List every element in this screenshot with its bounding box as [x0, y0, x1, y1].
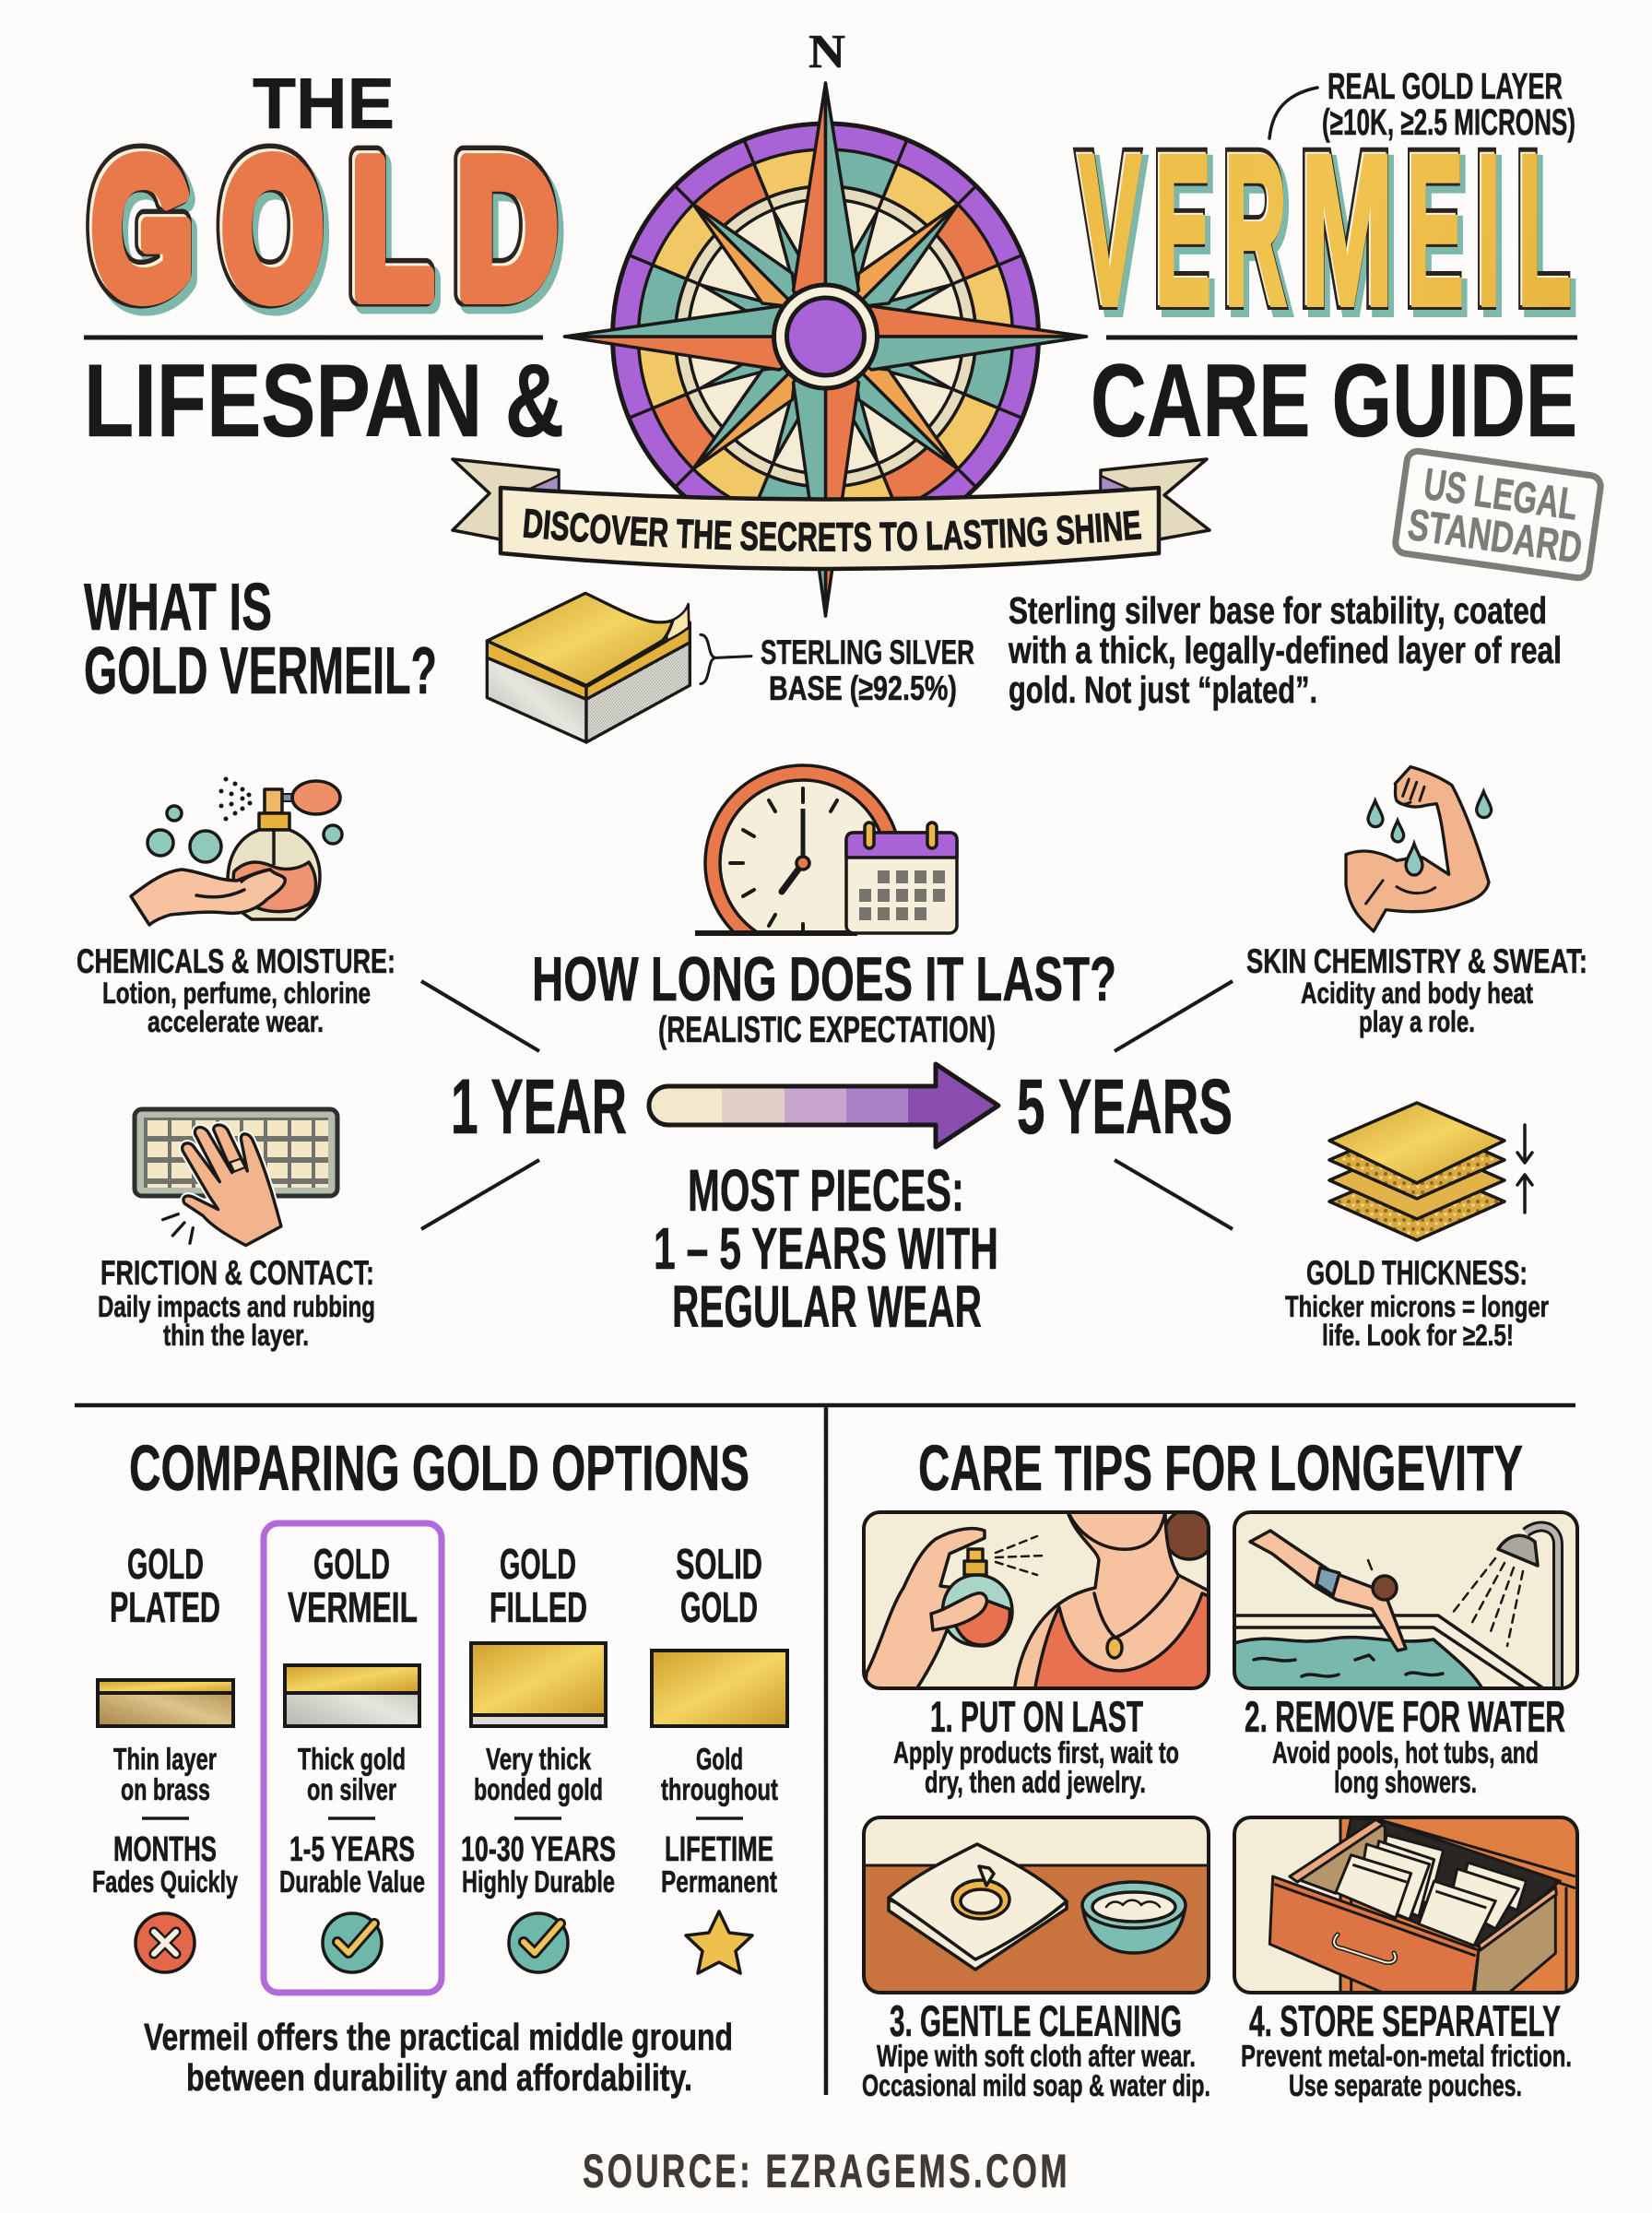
title: THE GOLD: G	[89, 116, 191, 335]
column: solid gold: GOLD	[680, 1583, 758, 1631]
column: gold filled: Highly Durable	[462, 1864, 615, 1899]
title: VERMEIL: R	[1224, 111, 1287, 350]
label: tip 3: Wipe with soft cloth after wear.	[877, 2039, 1196, 2073]
column: gold filled: GOLD	[500, 1540, 576, 1588]
title: THE GOLD: D	[459, 124, 560, 342]
highlight box: gold vermeil	[264, 1523, 442, 1993]
column: gold vermeil: 1-5 YEARS	[289, 1830, 415, 1869]
label: sterling silver base: STERLING SILVER	[761, 633, 974, 671]
heading: how long does it last: (REALISTIC EXPECTATION)	[658, 1010, 996, 1050]
column: gold vermeil: Durable Value	[279, 1864, 425, 1899]
column: gold plated: on brass	[121, 1772, 210, 1806]
title: VERMEIL: R	[1222, 109, 1285, 349]
title: VERMEIL: E	[1407, 111, 1464, 350]
stamp: US legal standard: STANDARD	[1405, 501, 1585, 574]
heading: how long does it last: HOW LONG DOES IT LAST?	[532, 944, 1116, 1014]
title: THE GOLD: D	[454, 116, 555, 335]
column: gold plated: MONTHS	[113, 1830, 217, 1869]
label: gold thickness: GOLD THICKNESS:	[1306, 1254, 1528, 1292]
icon: flexed sweaty arm	[1346, 767, 1492, 931]
infographic canvas: L	[1521, 116, 1575, 356]
title: VERMEIL: V	[1082, 116, 1145, 356]
label: skin chemistry and sweat	[1246, 942, 1587, 1038]
infographic canvas: L	[1517, 111, 1572, 350]
text: most pieces summary	[654, 1157, 998, 1340]
label: chemicals and moisture: CHEMICALS & MOISTURE:	[77, 942, 395, 980]
column: gold vermeil: GOLD	[313, 1540, 390, 1588]
title: THE GOLD: THE	[253, 63, 395, 144]
infographic canvas: L	[1516, 109, 1570, 349]
label: tip 2: Avoid pools, hot tubs, and	[1272, 1735, 1539, 1769]
column: gold filled	[461, 1540, 616, 1972]
title: VERMEIL: R	[1228, 116, 1291, 356]
title: THE GOLD: O	[219, 116, 320, 335]
source footer: SOURCE: EZRAGEMS.COM	[583, 2145, 1070, 2197]
label: friction and contact: thin the layer.	[163, 1319, 309, 1352]
title: THE GOLD: O	[219, 116, 320, 335]
label: tip 4	[1241, 1996, 1572, 2102]
title: THE GOLD: L	[348, 116, 430, 335]
title: VERMEIL: V	[1079, 111, 1141, 350]
title: VERMEIL: R	[1222, 109, 1285, 349]
text: vermeil conclusion	[144, 2016, 733, 2099]
label: tip 4: Use separate pouches.	[1289, 2068, 1522, 2102]
column: solid gold: LIFETIME	[665, 1830, 773, 1869]
column: solid gold: throughout	[661, 1772, 778, 1806]
compass N letter: N	[808, 26, 845, 78]
text: most pieces summary: 1 – 5 YEARS WITH	[654, 1215, 998, 1282]
panel: comparing gold options	[92, 1432, 787, 2099]
column: gold plated: Fades Quickly	[92, 1864, 238, 1899]
label: friction and contact: FRICTION & CONTACT:	[100, 1254, 374, 1292]
label: tip 3: Occasional mild soap & water dip.	[862, 2068, 1210, 2102]
label: skin chemistry and sweat: Acidity and body heat	[1301, 976, 1533, 1010]
text: most pieces summary: REGULAR WEAR	[672, 1273, 982, 1340]
title: VERMEIL: V	[1077, 109, 1139, 349]
illustration: drawer with pouches	[1234, 1812, 1587, 1996]
title: VERMEIL: E	[1405, 109, 1462, 349]
title: VERMEIL: E	[1159, 116, 1215, 356]
text: vermeil definition: gold. Not just “plated”.	[1009, 669, 1317, 711]
ribbon banner: DISCOVER THE SECRETS TO LASTING SHINE	[524, 509, 1141, 551]
title: VERMEIL: I	[1477, 111, 1501, 350]
column: gold vermeil: on silver	[307, 1772, 396, 1806]
title: VERMEIL: E	[1153, 109, 1210, 349]
title: VERMEIL: I	[1481, 116, 1504, 356]
label: gold thickness: Thicker microns = longer	[1285, 1290, 1549, 1323]
label: sterling silver base	[761, 633, 974, 707]
icon: layered gold on silver block	[487, 593, 751, 742]
label: tip 1	[893, 1692, 1179, 1799]
label: chemicals and moisture: Lotion, perfume, chlorine	[102, 976, 371, 1010]
column: gold vermeil: VERMEIL	[288, 1583, 418, 1631]
title: VERMEIL: E	[1155, 111, 1211, 350]
column: solid gold: Permanent	[661, 1864, 777, 1899]
column: gold plated: PLATED	[110, 1583, 220, 1631]
label: tip 1: 1. PUT ON LAST	[930, 1692, 1143, 1741]
text: most pieces summary: MOST PIECES:	[688, 1157, 964, 1224]
label: tip 2: long showers.	[1334, 1765, 1477, 1799]
illustration: swimmer and shower	[1234, 1512, 1577, 1692]
infographic canvas: L	[1516, 109, 1570, 349]
label: tip 1: Apply products first, wait to	[893, 1735, 1179, 1769]
title: VERMEIL: E	[1410, 116, 1468, 356]
label: tip 3: 3. GENTLE CLEANING	[890, 1996, 1182, 2045]
stamp: US legal standard	[1394, 450, 1602, 579]
title: THE GOLD: G	[95, 124, 196, 342]
label: 5 years: 5 YEARS	[1017, 1063, 1233, 1150]
icon: clock and calendar	[695, 763, 959, 936]
label: friction and contact: Daily impacts and rubbing	[98, 1290, 375, 1323]
title: THE GOLD: D	[454, 116, 555, 335]
title: VERMEIL: M	[1301, 111, 1394, 350]
illustration: cloth ring and bowl	[864, 1817, 1209, 1994]
label: friction and contact	[98, 1254, 375, 1352]
column: gold vermeil: Thick gold	[298, 1742, 406, 1776]
column: gold vermeil	[279, 1540, 425, 1972]
label: 1 year: 1 YEAR	[451, 1063, 627, 1150]
title: THE GOLD: L	[348, 116, 430, 335]
title: VERMEIL: I	[1475, 109, 1499, 349]
heading: what is gold vermeil: GOLD VERMEIL?	[84, 634, 437, 708]
illustration: perfume before jewelry	[864, 1509, 1217, 1692]
heading: what is gold vermeil: WHAT IS	[84, 571, 272, 645]
column: gold filled: Very thick	[486, 1742, 591, 1776]
callout: real gold layer	[1269, 66, 1575, 143]
title: THE GOLD: D	[457, 119, 557, 337]
heading: how long does it last	[532, 944, 1116, 1050]
title: VERMEIL: M	[1299, 109, 1392, 349]
title: VERMEIL: I	[1475, 109, 1499, 349]
title: THE GOLD: O	[222, 119, 323, 337]
stamp: US legal standard: US LEGAL	[1421, 460, 1581, 530]
column: gold filled: bonded gold	[474, 1772, 603, 1806]
arrow: 1 to 5 years gradient	[649, 1064, 998, 1147]
title: THE GOLD: O	[225, 124, 325, 342]
text: vermeil conclusion: between durability and affordability.	[186, 2056, 692, 2099]
label: tip 3	[862, 1996, 1210, 2102]
title: VERMEIL: V	[1077, 109, 1139, 349]
title: VERMEIL	[1077, 109, 1575, 356]
title: THE GOLD: G	[89, 116, 191, 335]
title: THE GOLD: L	[352, 119, 433, 337]
title: THE GOLD	[89, 63, 560, 342]
text: vermeil definition	[1008, 589, 1562, 711]
title: VERMEIL: M	[1299, 109, 1392, 349]
title: THE GOLD: L	[354, 124, 435, 342]
subtitle: LIFESPAN &: LIFESPAN &	[84, 343, 564, 458]
label: tip 1: dry, then add jewelry.	[925, 1765, 1146, 1799]
label: chemicals and moisture	[77, 942, 395, 1038]
column: gold filled: FILLED	[490, 1583, 587, 1631]
column: gold plated: GOLD	[127, 1540, 204, 1588]
text: vermeil conclusion: Vermeil offers the practical middle ground	[144, 2016, 733, 2058]
title: VERMEIL: E	[1405, 109, 1462, 349]
icon: gold layer stack	[1329, 1103, 1532, 1240]
label: gold thickness	[1285, 1254, 1549, 1352]
panel: care tips	[862, 1432, 1587, 2102]
label: skin chemistry and sweat: play a role.	[1359, 1005, 1475, 1038]
label: gold thickness: life. Look for ≥2.5!	[1322, 1319, 1514, 1352]
column: solid gold	[652, 1540, 787, 1973]
icon: hand on keyboard	[135, 1109, 337, 1246]
column: gold filled: 10-30 YEARS	[461, 1830, 616, 1869]
column: gold plated	[92, 1540, 238, 1972]
label: tip 2	[1245, 1692, 1565, 1799]
label: chemicals and moisture: accelerate wear.	[148, 1005, 324, 1038]
title: VERMEIL: E	[1153, 109, 1210, 349]
column: solid gold: Gold	[696, 1742, 743, 1776]
heading: comparing gold options: COMPARING GOLD OPTIONS	[129, 1432, 749, 1504]
icon: perfume and hand	[131, 776, 342, 925]
column: solid gold: SOLID	[676, 1540, 762, 1588]
title: VERMEIL: M	[1304, 116, 1398, 356]
label: sterling silver base: BASE (≥92.5%)	[769, 669, 957, 707]
compass rose	[564, 83, 1086, 616]
ribbon banner	[451, 457, 1211, 572]
column: gold plated: Thin layer	[113, 1742, 217, 1776]
heading: what is gold vermeil	[84, 571, 437, 708]
title: THE GOLD: G	[92, 119, 194, 337]
